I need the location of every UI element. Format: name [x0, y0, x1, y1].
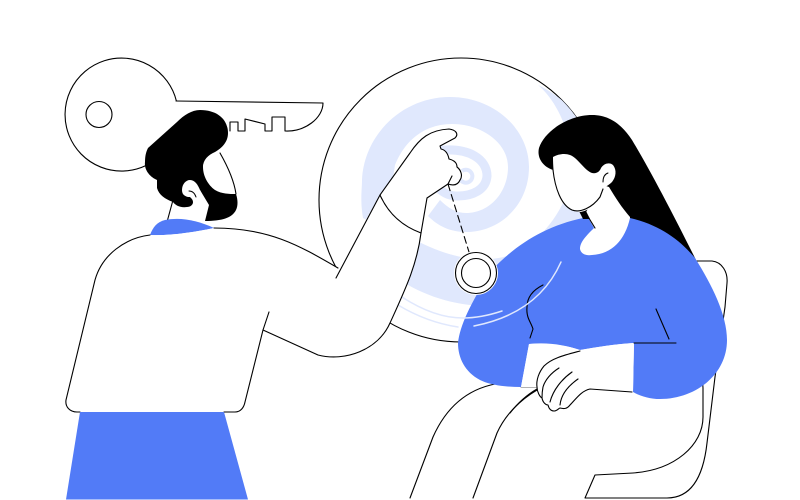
illustration: hypnotist and patient	[64, 58, 728, 500]
woman's shirt	[458, 215, 727, 399]
man's neck	[167, 200, 210, 224]
woman's neckline	[580, 205, 630, 255]
motion lines on shirt	[463, 262, 561, 326]
chair	[585, 261, 727, 498]
woman's hair	[539, 115, 696, 260]
motion line, light	[402, 297, 463, 318]
hypnotic spiral disc	[318, 58, 582, 342]
woman's sleeve and hand	[510, 343, 634, 413]
man's trousers	[66, 412, 248, 500]
man's body and arm	[66, 129, 462, 412]
pendulum	[448, 184, 498, 295]
woman's legs	[410, 384, 537, 498]
man's head	[145, 110, 238, 221]
shirt fold lines	[527, 285, 676, 343]
woman's neck	[586, 185, 630, 240]
woman's neck strand	[579, 209, 590, 219]
woman's face	[553, 154, 616, 212]
man's collar	[150, 219, 214, 235]
icon: key	[65, 58, 323, 171]
